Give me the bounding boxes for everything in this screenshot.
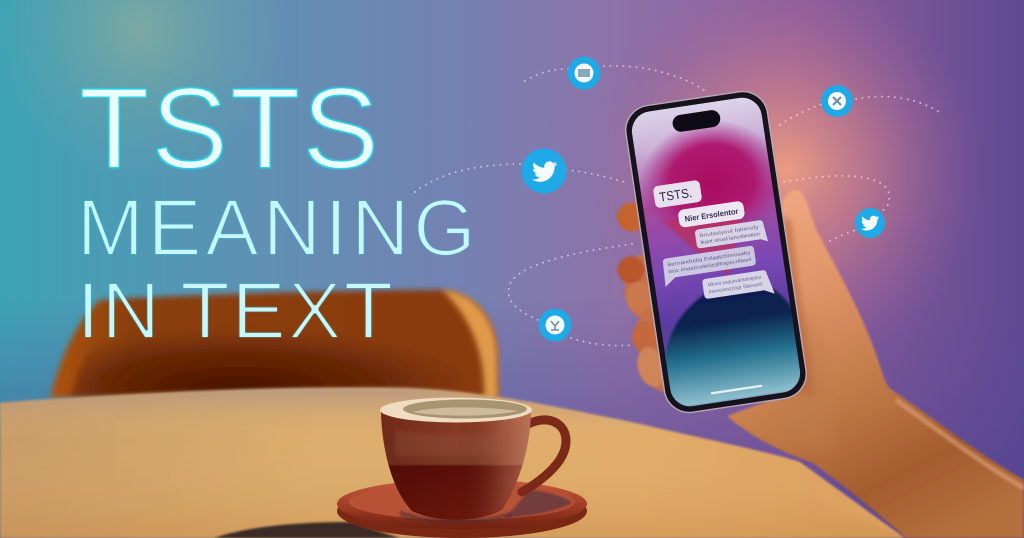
bubble: message two bbox=[661, 245, 758, 287]
cup rim and coffee bbox=[380, 398, 532, 422]
bubble: heading: Nier Ersolentor bbox=[684, 207, 739, 224]
bubble: message three: Inevssenzcogr Sikeseel bbox=[708, 282, 763, 295]
icon: app badge top right bbox=[821, 85, 853, 117]
smartphone bbox=[622, 87, 816, 416]
fingers bbox=[614, 199, 680, 392]
title line: MEANING: MEANING bbox=[77, 183, 480, 272]
icon: app badge bottom bbox=[538, 308, 572, 342]
screen wallpaper bbox=[632, 98, 800, 406]
coffee cup bbox=[375, 398, 566, 525]
title bbox=[77, 65, 480, 355]
forearm top highlight bbox=[896, 400, 1024, 488]
bubble: TSTS: TSTS. bbox=[658, 185, 693, 205]
cup body bbox=[381, 412, 531, 520]
bubble: message two: Isoc imaamottelizslifrapecrifasel bbox=[668, 257, 752, 275]
icon: twitter bird large bbox=[522, 148, 566, 194]
icon: app badge top bbox=[568, 56, 600, 90]
title line: IN TEXT: IN TEXT bbox=[77, 266, 395, 355]
bubble: message one: Ikant siruel lancsliestion bbox=[700, 231, 761, 246]
bubble: message three: Mhoot osdusvarttshsptov bbox=[707, 275, 762, 289]
hand and forearm bbox=[614, 190, 1024, 538]
icon: twitter bird small bbox=[855, 208, 885, 238]
chair back bbox=[50, 290, 498, 402]
dotted network lines bbox=[415, 66, 942, 346]
palm shading bbox=[775, 310, 833, 455]
bubble: message two: Beroandridiq Exlaatchhvosaby bbox=[667, 250, 752, 268]
message bubbles bbox=[651, 171, 776, 310]
table top bbox=[0, 388, 905, 538]
bubble: message one bbox=[695, 219, 768, 252]
home indicator bbox=[711, 385, 762, 395]
thumb base shadow bbox=[782, 215, 815, 395]
phone body bbox=[622, 88, 810, 416]
camera pill bbox=[671, 109, 721, 133]
cup handle bbox=[522, 420, 566, 492]
bubble: message three bbox=[702, 269, 775, 304]
title line: TSTS: TSTS bbox=[79, 65, 381, 193]
saucer bbox=[337, 479, 587, 538]
bubble: message one: Bnutaslyout fabieudy bbox=[699, 224, 760, 239]
